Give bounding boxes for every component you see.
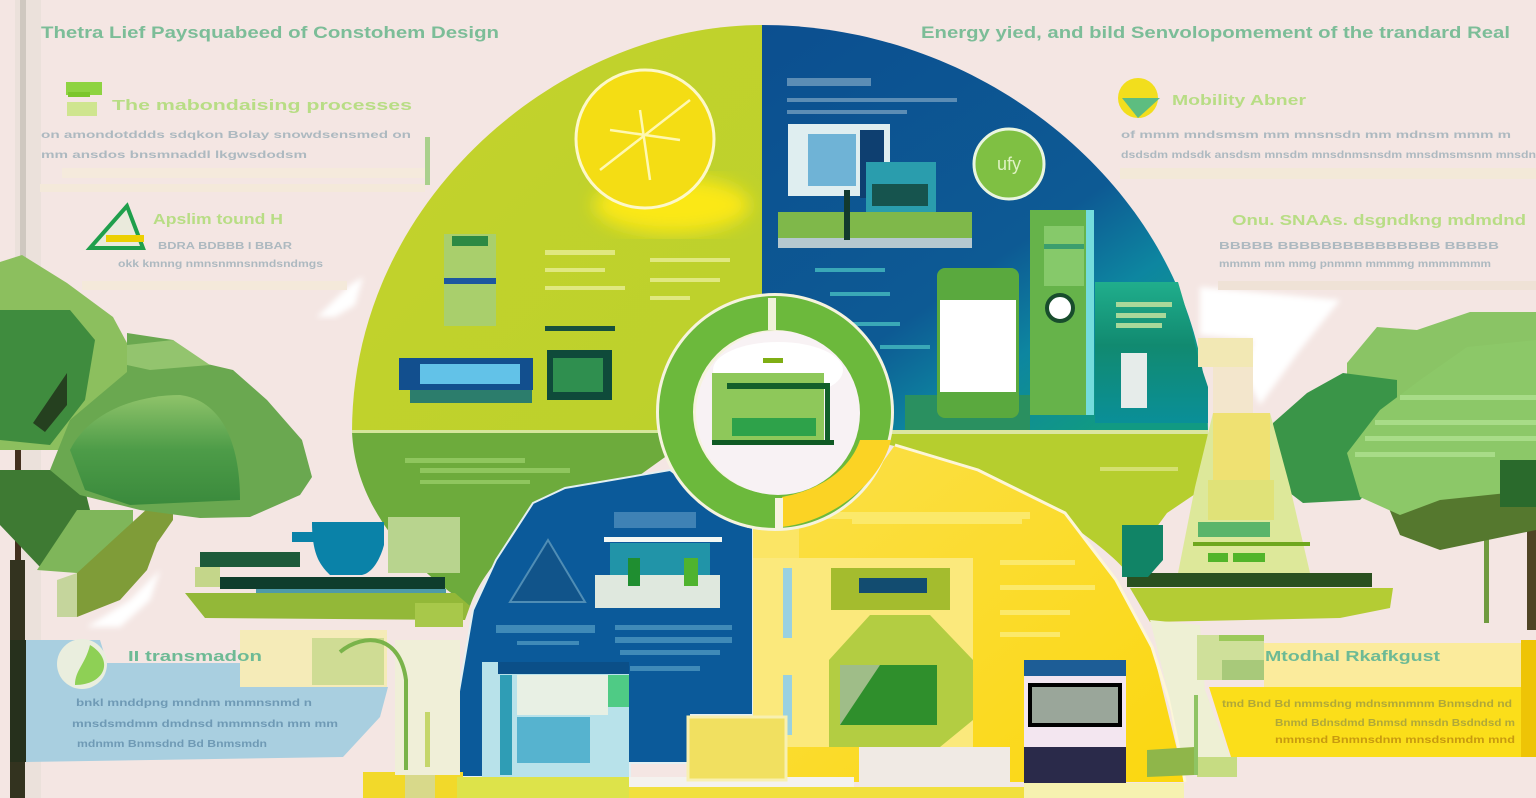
icon: monitor [788,124,936,212]
panel: top-right note [1118,78,1536,179]
panel: upper left lime quadrant [352,25,762,432]
green base [905,395,1030,430]
panel: top-right note: dsdsdm mdsdk ansdsm mnsdm mnsdnmsnsdm mnsdmsmsnm mnsdn [1121,149,1536,161]
panel: top-left note [40,82,430,192]
icon: green screen [545,326,615,400]
second canopy [50,333,312,518]
main title left: Thetra Lief Paysquabeed of Constohem Design [41,23,499,42]
body text: bnkl mnddpng mndnm mnmnsnmd n [76,697,312,709]
right flask and shelf [1122,338,1393,622]
main title right: Energy yied, and bild Senvolopomement of the trandard Real [921,23,1510,42]
trunk [10,440,25,798]
striped canopy [1347,340,1536,515]
panel: lower left blue quadrant [457,470,753,777]
heading: Mtodhal Rkafkgust [1265,648,1440,665]
heading: Onu. SNAAs. dsgndkng mdmdnd [1232,212,1526,229]
flask body [1178,338,1310,573]
icon: green round badge [1122,525,1163,577]
body text: BDRA BDBBB I BBAR [158,240,293,252]
panel: left triangle note: okk kmnng nmnsnmnsnmdsndmgs [118,258,323,270]
icon: white canister [937,268,1019,418]
text lines [545,250,730,300]
olive leaf [77,497,173,617]
body text: Bnmd Bdnsdmd Bnmsd mnsdn Bsdndsd m [1275,717,1515,729]
icon: blue cabinet [482,662,629,777]
icon: sun [576,70,714,208]
flask label [1193,522,1310,562]
center hub [656,293,894,531]
pale panel [753,558,973,747]
trunks [1484,487,1536,630]
panel: bottom-left note [10,630,460,798]
heading: Mobility Abner [1172,92,1306,109]
panel: upper right blue quadrant [762,25,1208,432]
heading: The mabondaising processes [112,97,412,114]
icon: triangle [90,206,144,248]
body text [72,697,338,750]
icon: green tablet [829,615,973,747]
icon: green circle badge: ufy [997,154,1021,174]
small plant [415,603,463,627]
body text: tmd Bnd Bd nmmsdng mdnsmnmnm Bnmsdnd nd [1222,698,1512,710]
icon: yellow badge [1118,78,1160,118]
body text: nmmsnd Bnmnsdnm mnsdsnmdm mnd [1275,734,1515,746]
panel: right lime band [880,430,1208,570]
plant [1147,695,1237,777]
body text [1222,698,1515,746]
lower olive foliage [1380,487,1536,550]
left shelf with cup [185,517,470,627]
body text: BBBBB BBBBBBBBBBBBBBB BBBBB [1219,240,1500,252]
icon: tall green device [1030,210,1094,415]
panel: left green band [352,430,700,606]
shelf [778,190,972,248]
icon: yellow box [688,717,786,780]
icon: green jar [1197,635,1264,680]
heading: II transmadon [128,648,262,665]
dark green lobe [1273,373,1397,503]
upper canopy [0,255,127,450]
icon: triangle outline [510,540,585,602]
main circle quadrants [352,25,1208,783]
lower dark foliage [0,470,90,567]
icon: lamp arc [340,640,435,798]
yellow sun glow [594,177,750,233]
icon: bottle [444,234,496,326]
left tree [0,255,312,798]
icon: green globe [57,639,107,689]
white block [859,747,1010,787]
heading: Apslim tound H [153,211,283,228]
panel: right mid note [1218,212,1536,290]
teal lines [815,268,930,349]
icon: teal cup [292,522,384,575]
panel: right mid note: mmmm mm mmg pnmmn mmmmg mmmmmmm [1219,258,1491,270]
icon: dish tray [595,537,722,608]
icon: green box [712,358,834,445]
icon: green circle badge [974,129,1044,199]
right teal block [1095,282,1208,423]
body text: mm ansdos bnsmnaddl lkgwsdodsm [41,149,307,161]
icon: green leaves [66,82,102,116]
upper lobe [1347,312,1536,400]
body text: mdnmm Bnmsdnd Bd Bnmsmdn [77,738,267,750]
right tree [1273,312,1536,630]
panel: lower right yellow quadrant [753,445,1185,783]
panel: bottom-right note [1147,620,1536,777]
body text: mnsdsmdmm dmdnsd mmmnsdn mm mm [72,718,338,730]
icon: small tag [831,568,950,610]
body text [41,129,411,161]
icon: blue device [399,358,533,403]
body text: on amondotddds sdqkon Bolay snowdsensmed on [41,129,411,141]
panel: left triangle note [82,206,347,290]
body text: of mmm mndsmsm mm mnsnsdn mm mdnsm mmm m [1121,129,1511,141]
bottom yellow base [363,717,1184,798]
icon: dark oven [1024,660,1126,783]
